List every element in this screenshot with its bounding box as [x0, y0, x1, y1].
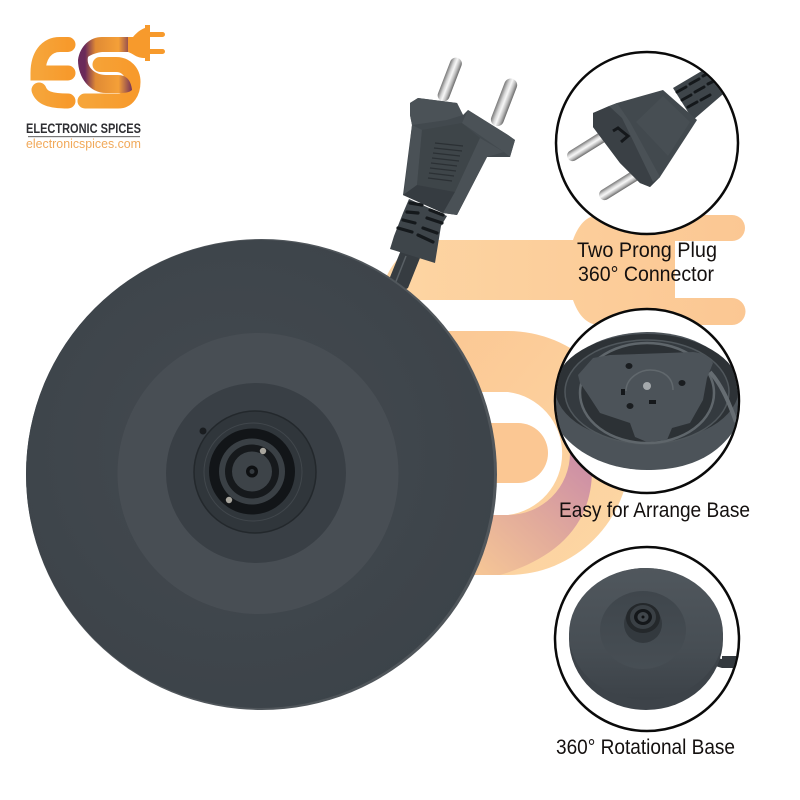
centre connector [194, 411, 316, 533]
cord [388, 250, 420, 290]
strain relief [390, 199, 447, 263]
logo wordmark: ELECTRONIC SPICES [26, 120, 141, 136]
inner circular channel [580, 343, 714, 443]
main product: round base [26, 239, 497, 710]
logo website: electronicspices.com [26, 136, 141, 151]
small base inner zone [602, 591, 684, 620]
caption: 360 rotational base: 360° Rotational Base [556, 736, 735, 759]
logo: Electronic Spices [26, 25, 162, 151]
dark inner zone [166, 383, 346, 563]
detail circle: rotational base [555, 547, 739, 731]
main product: plug and cord [388, 56, 519, 290]
plug body [403, 98, 515, 215]
raised middle zone [118, 333, 398, 614]
detail circle: two prong plug [556, 52, 738, 234]
watermark: large pale plug and S logo [385, 215, 746, 575]
small base body [569, 568, 723, 710]
caption: 360 connector: 360° Connector [578, 263, 714, 286]
base rim [26, 239, 497, 710]
side cable [717, 656, 736, 668]
plug body close-up [593, 90, 697, 187]
detail circle: underside of base [555, 309, 740, 493]
base top surface [26, 240, 494, 708]
caption: easy for arrange base: Easy for Arrange Base [559, 499, 750, 522]
small base connector [624, 603, 662, 643]
plug pins close-up [567, 134, 638, 200]
caption: two prong plug: Two Prong Plug [577, 239, 717, 262]
cable channel [710, 372, 736, 422]
logo mark: S with plug [78, 25, 162, 101]
trefoil plate [578, 352, 713, 442]
base underside shell [556, 332, 740, 470]
logo mark: E [38, 44, 68, 101]
plug pins [436, 56, 519, 128]
strain relief close-up [673, 71, 723, 118]
